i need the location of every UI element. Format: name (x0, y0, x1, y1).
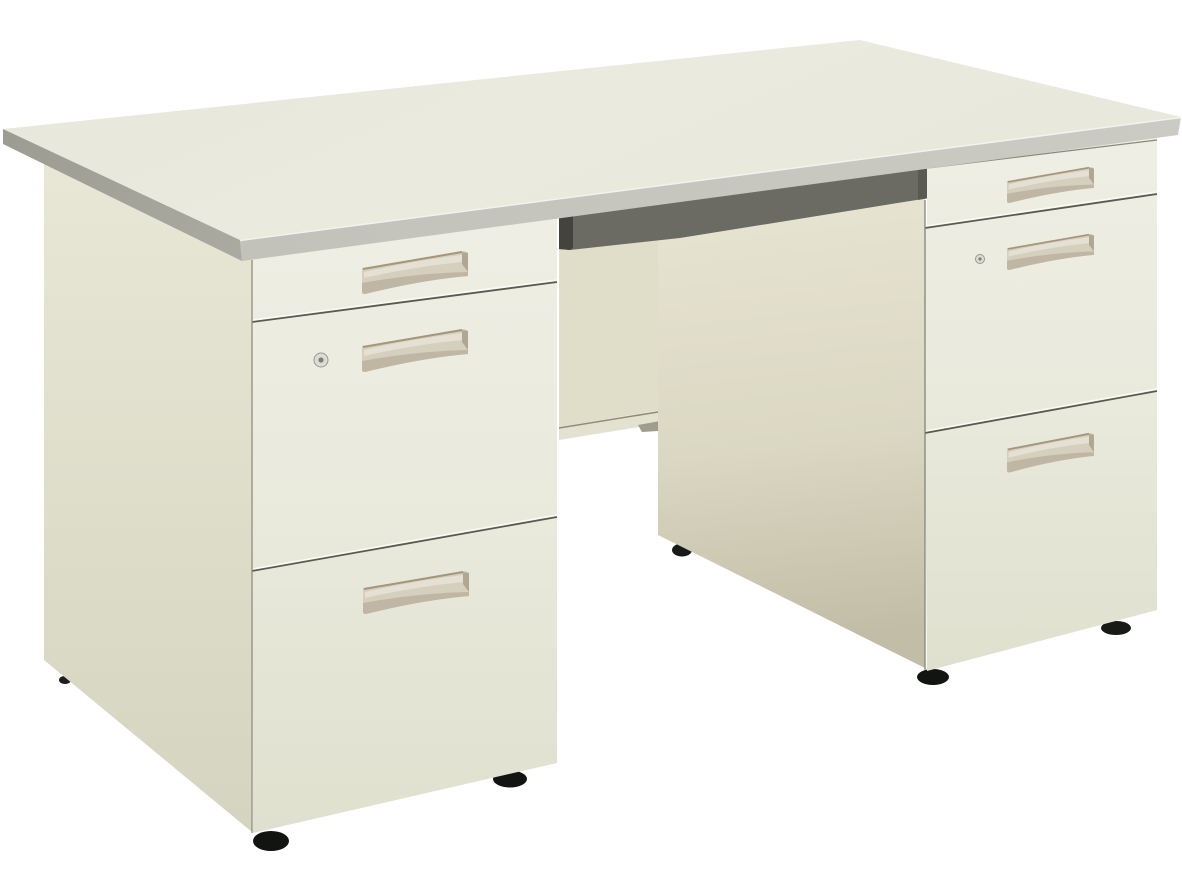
right drawer handle 2 (1007, 234, 1094, 270)
left drawer 1 (252, 218, 557, 322)
foot: right pedestal inner rear (672, 544, 692, 556)
left drawer handle 3 (363, 571, 469, 614)
left drawer handle 1 (362, 251, 468, 294)
desktop left edge (3, 129, 242, 261)
desktop front edge (240, 117, 1181, 261)
right drawer 3 (925, 391, 1157, 671)
left drawer 2 (252, 282, 557, 571)
right pedestal fronts (925, 130, 1157, 671)
foot: left pedestal right (493, 770, 527, 788)
modesty back panel (559, 222, 664, 440)
left pedestal fronts (252, 218, 557, 833)
right drawer 1 (927, 130, 1157, 227)
foot: right pedestal rear (1101, 621, 1131, 635)
right drawer handle 1 (1007, 167, 1094, 203)
right drawer 2 (925, 194, 1157, 433)
left pedestal side panel (44, 164, 252, 832)
left drawer 3 (252, 517, 557, 833)
left drawer handle 2 (362, 329, 468, 372)
desktop (3, 40, 1181, 261)
foot: front left (253, 831, 289, 851)
right pedestal inner side panel (658, 185, 925, 668)
desktop surface (3, 40, 1181, 240)
centre drawer tray (559, 168, 930, 250)
lock: left pedestal (314, 353, 328, 367)
far left foot (59, 676, 71, 684)
right drawer handle 3 (1007, 433, 1094, 472)
foot: right pedestal front (917, 669, 949, 685)
lock: right pedestal (976, 254, 984, 264)
